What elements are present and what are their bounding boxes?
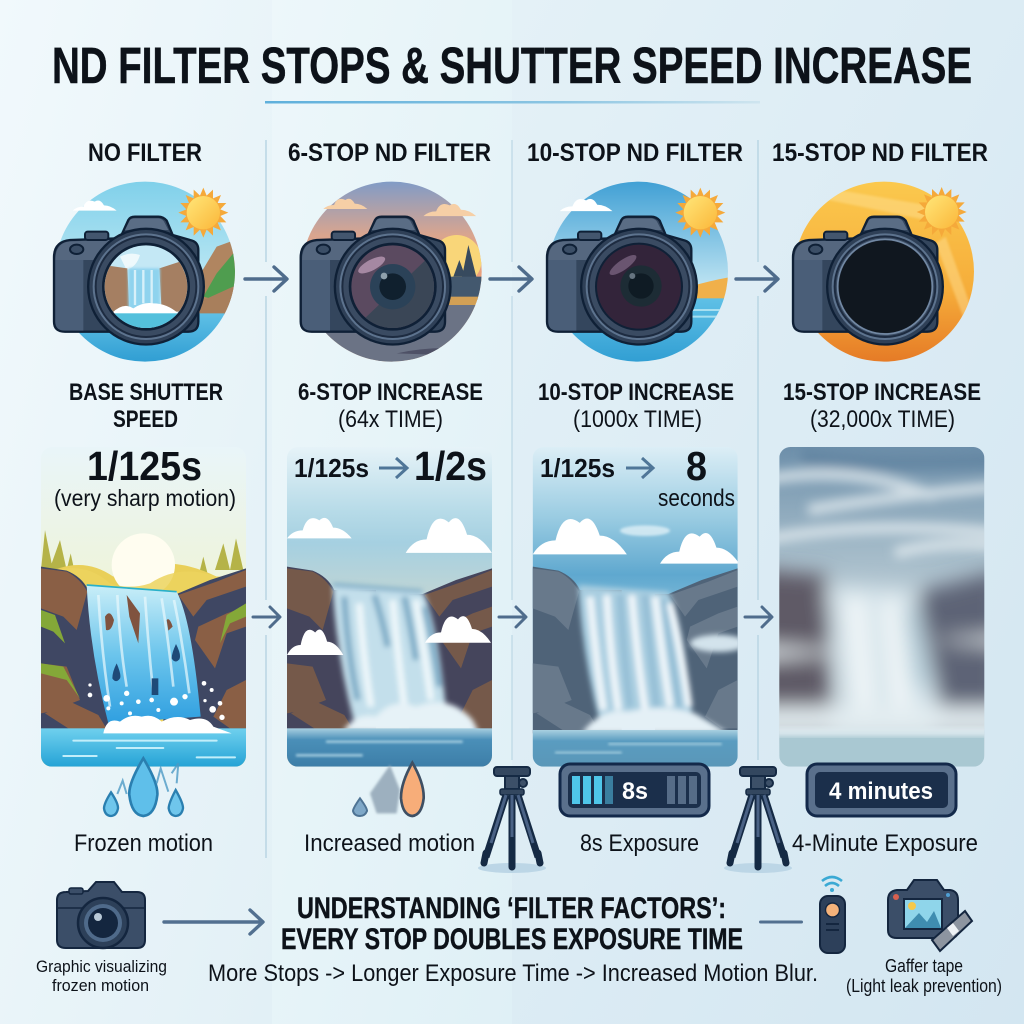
conclusion: More Stops -> Longer Exposure Time -> Increased Motion Blur. bbox=[208, 960, 818, 987]
conclusion: EVERY STOP DOUBLES EXPOSURE TIME bbox=[281, 923, 743, 956]
arrow row 1: 2 to 3 bbox=[490, 267, 532, 291]
icon: frozen drops bbox=[104, 758, 183, 816]
15-stop labels: 15-STOP INCREASE bbox=[783, 379, 981, 406]
15-stop labels bbox=[783, 379, 981, 433]
photo: 10-stop waterfall bbox=[533, 447, 747, 767]
icon: increased motion drops bbox=[353, 763, 424, 816]
photo: 6-stop waterfall bbox=[287, 447, 492, 767]
timer display: 8s: 8s bbox=[622, 778, 648, 805]
photo: frozen waterfall bbox=[41, 447, 246, 767]
photo: 15-stop waterfall bbox=[779, 447, 984, 766]
10-stop labels: 8 bbox=[686, 443, 707, 489]
timer display: 8s bbox=[560, 764, 709, 816]
10-stop labels: 10-STOP INCREASE bbox=[538, 379, 734, 406]
caption: gaffer tape bbox=[846, 956, 1002, 996]
10-stop labels: (1000x TIME) bbox=[573, 406, 702, 433]
6-stop labels bbox=[294, 379, 487, 489]
icon: small camera bbox=[57, 882, 145, 948]
row 2 base labels bbox=[54, 379, 236, 511]
caption: frozen graphic: frozen motion bbox=[52, 976, 149, 995]
camera circle: no filter bbox=[53, 180, 240, 363]
camera circle: 10-stop bbox=[546, 180, 733, 365]
connector bbox=[759, 920, 803, 924]
caption: 4-minute exposure: 4-Minute Exposure bbox=[792, 830, 978, 857]
row 2 base labels: (very sharp motion) bbox=[54, 485, 236, 511]
arrow row 2: 2 to 3 bbox=[499, 607, 526, 627]
column headings: 10-STOP ND FILTER bbox=[527, 139, 743, 167]
row 2 base labels: BASE SHUTTER bbox=[69, 379, 223, 406]
caption: gaffer tape: Gaffer tape bbox=[885, 956, 963, 976]
timer display: 4 minutes: 4 minutes bbox=[829, 778, 933, 805]
icon: remote bbox=[820, 877, 845, 953]
arrow row 1: 3 to 4 bbox=[736, 267, 778, 291]
10-stop labels: 1/125s bbox=[540, 453, 615, 483]
icon: camera with tape bbox=[888, 880, 972, 951]
caption: gaffer tape: (Light leak prevention) bbox=[846, 976, 1002, 996]
caption: increased motion: Increased motion bbox=[304, 830, 475, 857]
tripod 2 bbox=[724, 767, 792, 873]
arrow row 1: 1 to 2 bbox=[245, 267, 287, 291]
caption: 8s exposure: 8s Exposure bbox=[580, 830, 699, 857]
6-stop labels: (64x TIME) bbox=[338, 406, 443, 433]
conclusion bbox=[208, 892, 818, 987]
row 2 base labels: SPEED bbox=[113, 406, 178, 433]
conclusion: UNDERSTANDING ‘FILTER FACTORS’: bbox=[297, 892, 726, 925]
6-stop labels: 1/125s bbox=[294, 453, 369, 483]
title underline bbox=[265, 101, 760, 104]
arrow row 2: 1 to 2 bbox=[253, 607, 280, 627]
column headings: NO FILTER bbox=[88, 139, 202, 167]
6-stop labels: 1/2s bbox=[414, 443, 487, 489]
15-stop labels: (32,000x TIME) bbox=[810, 406, 955, 433]
tripod 1 bbox=[478, 767, 546, 873]
row 2 base labels: 1/125s bbox=[87, 443, 202, 489]
arrow to conclusion bbox=[164, 910, 263, 934]
arrow row 2: 3 to 4 bbox=[745, 607, 772, 627]
timer display: 4 minutes bbox=[807, 764, 956, 816]
caption: frozen graphic: Graphic visualizing bbox=[36, 957, 167, 976]
camera circle: 15-stop bbox=[792, 180, 979, 363]
10-stop labels: seconds bbox=[658, 485, 735, 512]
6-stop labels: 6-STOP INCREASE bbox=[298, 379, 483, 406]
10-stop labels bbox=[538, 379, 735, 512]
column headings: 6-STOP ND FILTER bbox=[288, 139, 491, 167]
column headings bbox=[88, 139, 988, 167]
camera circle: 6-stop bbox=[300, 180, 487, 365]
column headings: 15-STOP ND FILTER bbox=[772, 139, 988, 167]
caption: frozen graphic bbox=[36, 957, 167, 995]
caption: frozen motion: Frozen motion bbox=[74, 830, 213, 857]
